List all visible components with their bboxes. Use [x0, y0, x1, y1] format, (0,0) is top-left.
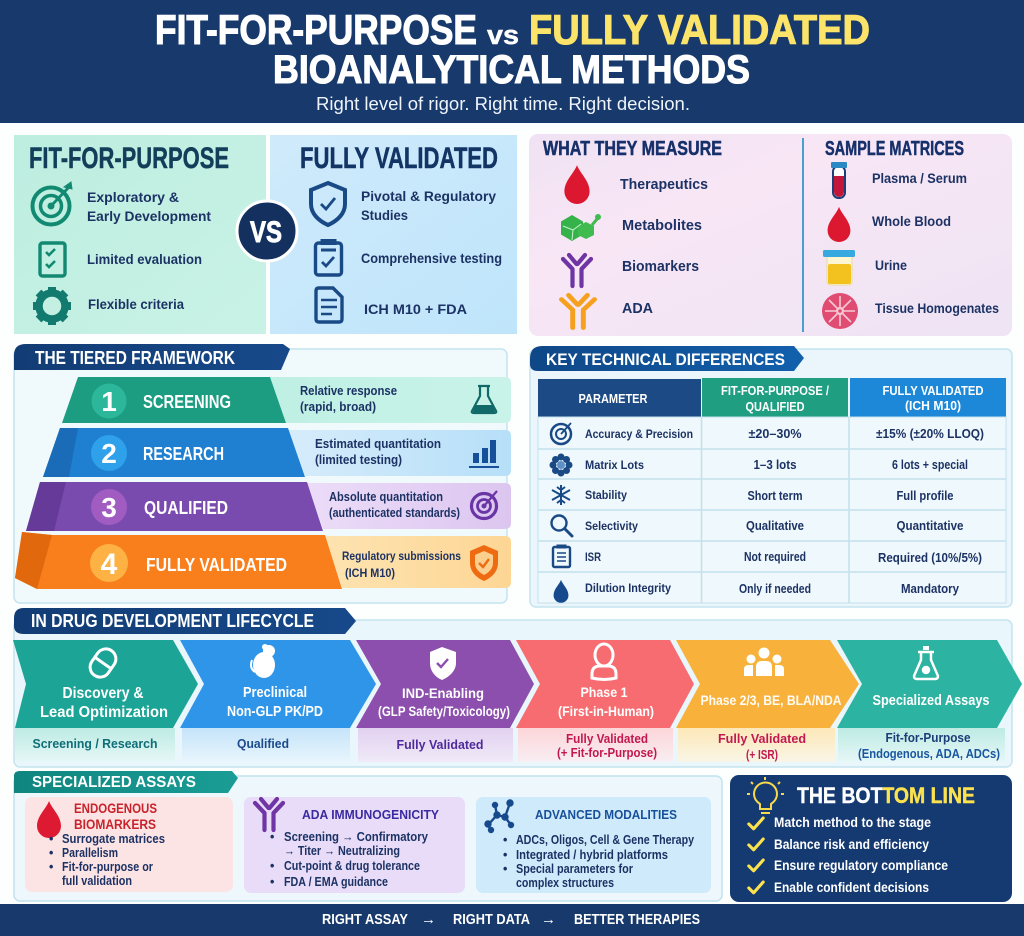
icon: bar chart [469, 440, 499, 468]
card: ada immunogenicity: Screening → Confirmatory [284, 830, 428, 844]
stage: preclinical: Qualified [237, 736, 289, 751]
table header [538, 378, 1006, 417]
stage: discovery: Lead Optimization [40, 704, 168, 721]
stage: discovery: Discovery & [62, 685, 144, 702]
row: isr [553, 545, 982, 567]
tier 4: 4 [101, 548, 118, 581]
text: comprehensive testing: Comprehensive testing [361, 251, 502, 266]
table header: (ICH M10) [905, 399, 961, 413]
icon: shield [311, 183, 345, 225]
icon: document [316, 288, 342, 322]
row: matrix lots: 6 lots + special [892, 458, 968, 472]
row: stability: Short term [748, 489, 802, 503]
text: exploratory [87, 190, 212, 224]
text: pivotal: Studies [361, 208, 408, 223]
stage: phase 2/3 [676, 640, 859, 762]
checklist: Enable confident decisions [774, 880, 929, 895]
row: dilution: Dilution Integrity [585, 581, 671, 595]
text: plasma: Plasma / Serum [872, 171, 967, 186]
table [538, 378, 1006, 603]
icon: urine cup [823, 250, 855, 285]
table header: QUALIFIED [746, 400, 804, 414]
row: selectivity: Quantitative [896, 519, 964, 533]
checklist [749, 815, 948, 895]
card: endogenous biomarkers: full validation [62, 874, 132, 888]
card: advanced modalities: • [503, 833, 507, 847]
stage: ind-enabling: IND-Enabling [402, 685, 484, 701]
row: isr: Required (10%/5%) [878, 551, 982, 565]
tier 3 [26, 482, 511, 531]
card: endogenous biomarkers: BIOMARKERS [74, 817, 156, 832]
stage: specialized assays: (Endogenous, ADA, ADCs) [858, 746, 1000, 761]
footer banner: RIGHT ASSAY [322, 912, 408, 928]
panel: fit-for-purpose [14, 135, 266, 334]
panel: tiered framework [14, 344, 511, 603]
tier 4: Regulatory submissions [342, 549, 461, 563]
icon: target [32, 182, 72, 224]
tier 4: FULLY VALIDATED [146, 555, 287, 575]
row: matrix lots: 1–3 lots [754, 458, 797, 472]
panel: drug development lifecycle [13, 608, 1022, 767]
icon: flask [914, 646, 938, 679]
stage: preclinical: Preclinical [243, 684, 307, 701]
subtitle: Right level of rigor. Right time. Right decision. [316, 94, 690, 114]
tier 2: (limited testing) [315, 453, 402, 467]
ribbon heading: key technical differences: KEY TECHNICAL DIFFERENCES [546, 350, 785, 369]
row: dilution: Only if needed [739, 582, 811, 596]
footer banner: → [541, 911, 556, 928]
icon: molecule [561, 214, 601, 241]
stage: ind-enabling: (GLP Safety/Toxicology) [378, 703, 510, 719]
card: endogenous biomarkers [25, 797, 233, 892]
icon: drop [564, 165, 590, 204]
row: accuracy: ±15% (±20% LLOQ) [876, 427, 984, 441]
icon: gear [33, 287, 71, 325]
table header: FULLY VALIDATED [882, 384, 984, 398]
card: advanced modalities: Integrated / hybrid platforms [516, 848, 668, 862]
stage: phase 1: Fully Validated [566, 732, 648, 746]
card: endogenous biomarkers: Surrogate matrices [62, 832, 165, 846]
icon: tissue [822, 293, 858, 329]
title line 2: BIOANALYTICAL METHODS [273, 48, 750, 92]
card: advanced modalities: • [503, 848, 507, 862]
row: selectivity: Selectivity [585, 519, 638, 533]
ribbon heading: specialized assays [14, 771, 238, 793]
panel: the bottom line [730, 775, 1012, 902]
card: ada immunogenicity: • [270, 859, 274, 873]
heading: the bottom line: THE BOTTOM LINE [797, 783, 975, 808]
card: endogenous biomarkers: ENDOGENOUS [74, 801, 157, 816]
row: dilution: Mandatory [901, 582, 959, 596]
icon: pill [86, 645, 120, 681]
card: ada immunogenicity [244, 797, 465, 893]
icon: target [472, 491, 497, 518]
stage: specialized assays [837, 640, 1022, 762]
row: accuracy: ±20–30% [748, 427, 802, 441]
footer banner: → [421, 911, 436, 928]
tier 1: (rapid, broad) [300, 400, 376, 414]
panel: what they measure and sample matrices [529, 134, 1012, 336]
icon: test tube [831, 162, 847, 198]
text: tissue homogenates: Tissue Homogenates [875, 301, 999, 316]
tier 1 [62, 377, 511, 423]
text: exploratory: Exploratory & [87, 190, 179, 205]
heading: fit-for-purpose: FIT-FOR-PURPOSE [29, 142, 229, 175]
icon: purple antibody [563, 255, 591, 286]
icon: orange antibody [561, 295, 595, 328]
row: stability: Full profile [896, 489, 954, 503]
text: exploratory: Early Development [87, 209, 212, 224]
stage: phase 2/3: Fully Validated [718, 731, 806, 746]
card: advanced modalities: complex structures [516, 876, 614, 890]
table header: PARAMETER [578, 392, 648, 406]
card: ada immunogenicity: → Titer → Neutralizing [284, 844, 400, 858]
tier 1: SCREENING [143, 392, 231, 412]
icon: flask [472, 386, 496, 413]
text: pivotal [361, 189, 496, 223]
stage: preclinical [180, 640, 376, 762]
stage: discovery: Screening / Research [32, 736, 158, 751]
tier 2 [43, 428, 511, 477]
icon: shield [430, 647, 456, 680]
row: accuracy [551, 423, 984, 444]
card: endogenous biomarkers: Parallelism [62, 846, 118, 860]
row: dilution [554, 580, 959, 603]
text: ada: ADA [622, 301, 654, 317]
card: ada immunogenicity: • [270, 830, 274, 844]
title line 1: vs [487, 20, 519, 50]
panel: fully validated [270, 135, 517, 334]
stage: phase 2/3: (+ ISR) [746, 747, 778, 762]
tier 1: Relative response [300, 384, 397, 398]
row: selectivity [552, 516, 964, 536]
footer banner: RIGHT DATA [453, 912, 530, 928]
text: urine: Urine [875, 258, 907, 273]
text: pivotal: Pivotal & Regulatory [361, 189, 496, 204]
table header: FIT-FOR-PURPOSE / [721, 384, 829, 398]
ribbon heading: tiered framework [14, 344, 290, 370]
tier 4: (ICH M10) [345, 566, 395, 580]
card: endogenous biomarkers: • [49, 832, 53, 846]
tier 4 [15, 532, 511, 589]
stage: phase 1 [516, 640, 694, 762]
stage: phase 1: (First-in-Human) [558, 703, 654, 719]
text: metabolites: Metabolites [622, 218, 702, 234]
heading: fully validated: FULLY VALIDATED [300, 142, 498, 175]
stage: phase 1: Phase 1 [580, 684, 628, 700]
heading: sample matrices: SAMPLE MATRICES [825, 138, 964, 160]
footer banner [0, 904, 1024, 936]
stage: preclinical: Non-GLP PK/PD [227, 703, 323, 720]
tier 2: RESEARCH [143, 444, 224, 464]
tier 1: 1 [101, 386, 117, 417]
card: endogenous biomarkers: Fit-for-purpose or [62, 860, 153, 874]
row: selectivity: Qualitative [746, 519, 804, 533]
row: stability: Stability [585, 488, 627, 502]
header banner [0, 0, 1024, 123]
card: endogenous biomarkers: • [49, 860, 53, 874]
stage: specialized assays: Specialized Assays [872, 693, 990, 709]
card: advanced modalities: ADCs, Oligos, Cell & Gene Therapy [516, 833, 694, 847]
text: biomarkers: Biomarkers [622, 259, 699, 275]
ribbon heading: lifecycle: IN DRUG DEVELOPMENT LIFECYCLE [31, 611, 314, 631]
ribbon heading: specialized assays: SPECIALIZED ASSAYS [32, 774, 196, 791]
icon: people [744, 648, 784, 676]
tier 3: (authenticated standards) [329, 506, 460, 520]
card: ada immunogenicity: • [270, 875, 274, 889]
badge: vs [237, 201, 297, 261]
card: advanced modalities: • [503, 862, 507, 876]
stage: discovery [13, 640, 198, 762]
stage: phase 1: (+ Fit-for-Purpose) [557, 746, 657, 760]
title line 1: FULLY VALIDATED [529, 6, 870, 53]
card: ada immunogenicity: FDA / EMA guidance [284, 875, 388, 889]
icon: whole blood drop [828, 207, 850, 242]
icon: molecule [486, 800, 513, 832]
footer banner: BETTER THERAPIES [574, 912, 700, 928]
icon: mouse [251, 644, 275, 678]
row: stability [552, 485, 954, 505]
panel: specialized assays [14, 771, 722, 901]
icon: drop [37, 801, 61, 838]
card: ada immunogenicity: Cut-point & drug tolerance [284, 859, 420, 873]
icon: clipboard [40, 243, 65, 276]
stage: specialized assays: Fit-for-Purpose [886, 730, 970, 745]
card: advanced modalities [476, 797, 711, 893]
tier 2: Estimated quantitation [315, 437, 441, 451]
card: advanced modalities: ADVANCED MODALITIES [535, 807, 677, 822]
badge: vs: VS [250, 216, 282, 249]
text: flexible criteria: Flexible criteria [88, 297, 184, 312]
text: ich m10: ICH M10 + FDA [364, 302, 467, 317]
row: isr: Not required [744, 550, 806, 564]
text: limited evaluation: Limited evaluation [87, 252, 202, 267]
heading: what they measure: WHAT THEY MEASURE [543, 138, 722, 160]
tier 3: Absolute quantitation [329, 490, 443, 504]
checklist: Balance risk and efficiency [774, 837, 929, 852]
row: isr: ISR [585, 550, 601, 564]
checklist: Match method to the stage [774, 815, 931, 830]
title line 1: FIT-FOR-PURPOSE [155, 6, 477, 53]
stage: ind-enabling [356, 640, 534, 762]
row: matrix lots [550, 454, 968, 476]
icon: person [592, 644, 616, 680]
icon: shield [470, 545, 498, 581]
icon: antibody [255, 799, 283, 830]
row: matrix lots: Matrix Lots [585, 458, 644, 472]
text: therapeutics: Therapeutics [620, 177, 708, 193]
card: endogenous biomarkers: • [49, 846, 53, 860]
checklist: Ensure regulatory compliance [774, 858, 948, 873]
text: whole blood: Whole Blood [872, 214, 951, 229]
card: ada immunogenicity: ADA IMMUNOGENICITY [302, 807, 439, 822]
card: advanced modalities: Special parameters for [516, 862, 633, 876]
title line 1 [155, 6, 870, 53]
tier 3: 3 [101, 492, 117, 523]
icon: clipboard [316, 240, 342, 275]
tier 2: 2 [101, 438, 117, 469]
icon: light bulb [747, 777, 784, 813]
row: accuracy: Accuracy & Precision [585, 427, 693, 441]
ribbon heading: tiered framework: THE TIERED FRAMEWORK [35, 348, 235, 368]
stage: ind-enabling: Fully Validated [396, 737, 484, 752]
panel: key technical differences [530, 346, 1012, 607]
tier 3: QUALIFIED [144, 498, 228, 518]
stage: phase 2/3: Phase 2/3, BE, BLA/NDA [700, 692, 842, 708]
